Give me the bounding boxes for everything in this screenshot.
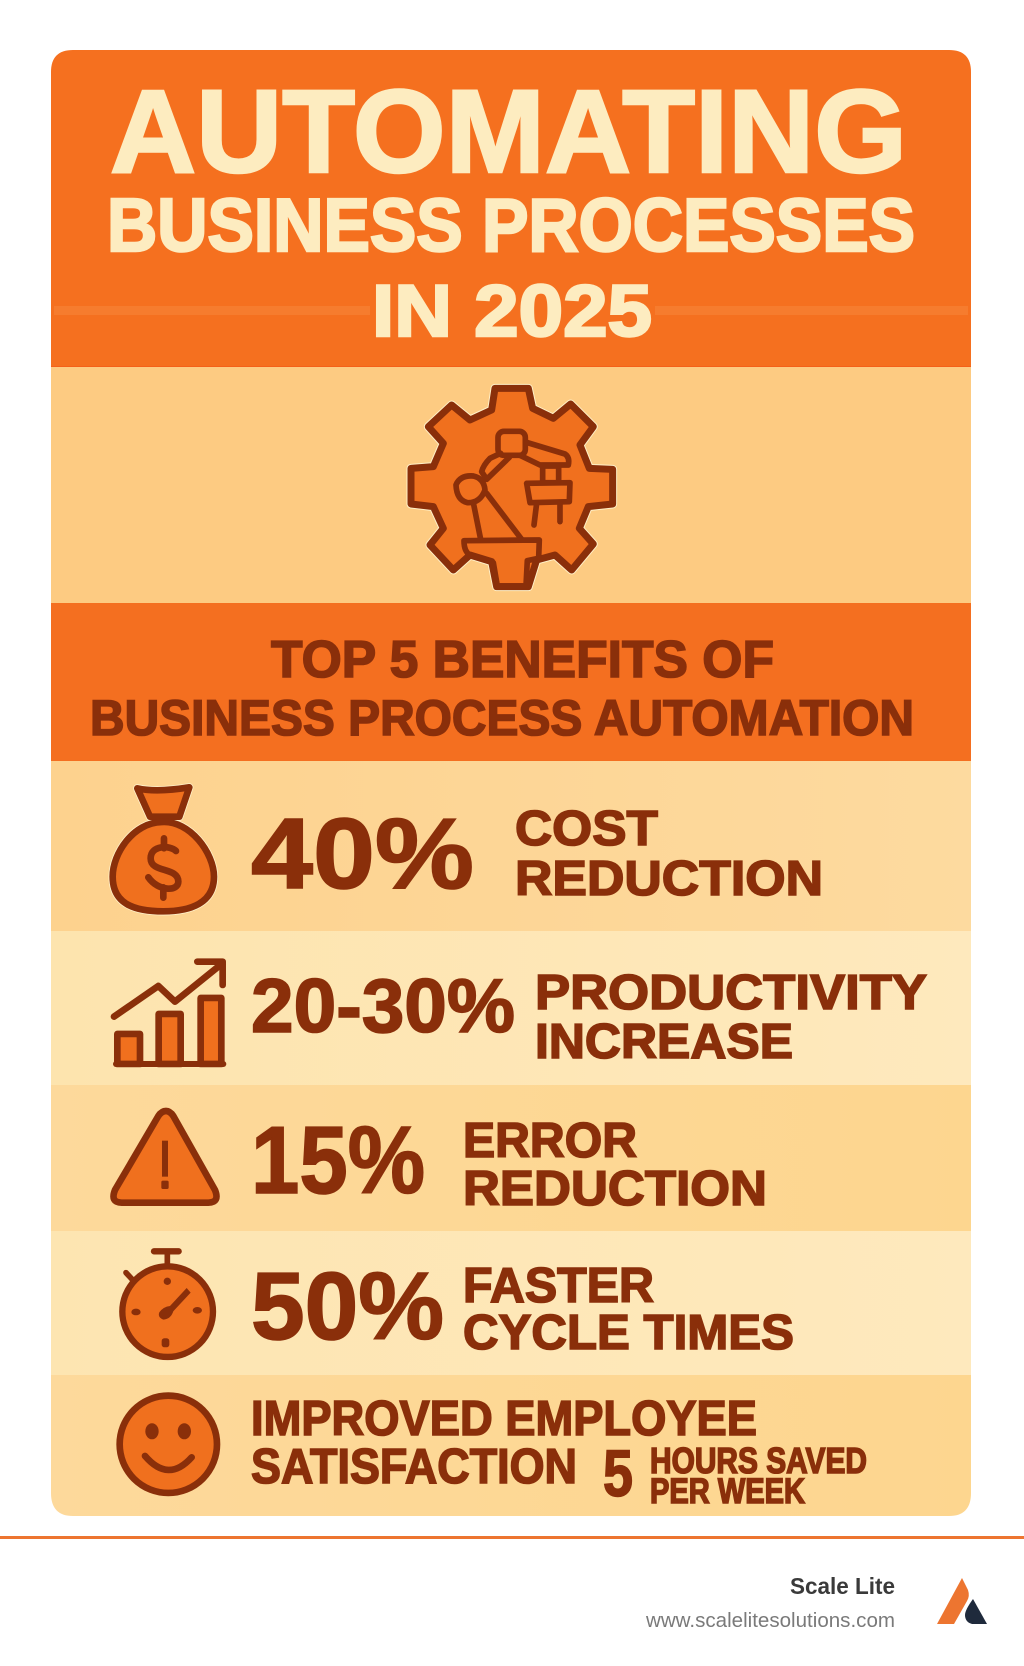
heading line 1: TOP 5 BENEFITS OF: [271, 631, 774, 689]
icon: money bag: [113, 787, 214, 911]
icon: gear with robot arm: [411, 388, 613, 587]
stat: 50%: 50%: [251, 1253, 444, 1360]
stat: 40%: 40%: [251, 798, 474, 910]
label: productivity increase: PRODUCTIVITY: [535, 966, 927, 1020]
label: productivity increase: INCREASE: [535, 1015, 793, 1069]
icon: warning triangle: [113, 1111, 216, 1203]
panel: benefits heading band: [51, 603, 971, 761]
stat: 20-30%: 20-30%: [251, 964, 515, 1049]
panel: improved employee satisfaction: [51, 1375, 971, 1516]
label: productivity increase: [535, 966, 927, 1069]
label: error reduction: ERROR: [463, 1114, 637, 1168]
title line 1: AUTOMATING: [110, 66, 907, 198]
footer: brand: [645, 1573, 987, 1632]
label: faster cycle times: FASTER: [463, 1259, 654, 1313]
label: faster cycle times: CYCLE TIMES: [463, 1306, 794, 1360]
label: improved employee satisfaction: IMPROVED EMPLOYEE: [251, 1392, 757, 1446]
icon: smiley face: [120, 1396, 217, 1493]
panel: 40% cost reduction: [51, 761, 971, 931]
brand name: Scale Lite: [790, 1573, 895, 1599]
icon: growth chart: [114, 962, 223, 1064]
panel: 20-30% productivity increase: [51, 931, 971, 1085]
label: hours saved per week: [650, 1440, 867, 1511]
label: hours saved per week: HOURS SAVED: [650, 1440, 867, 1481]
label: error reduction: [463, 1114, 767, 1216]
label: cost reduction: REDUCTION: [515, 852, 823, 906]
title line 2: BUSINESS PROCESSES: [107, 183, 915, 267]
brand url: www.scalelitesolutions.com: [645, 1610, 895, 1632]
label: improved employee satisfaction: [251, 1392, 757, 1494]
stat: 15%: 15%: [251, 1107, 425, 1214]
label: hours saved per week: PER WEEK: [650, 1472, 805, 1511]
panel: title header: [51, 50, 971, 368]
label: improved employee satisfaction: SATISFACTION: [251, 1440, 577, 1494]
label: error reduction: REDUCTION: [463, 1162, 767, 1216]
label: faster cycle times: [463, 1259, 794, 1360]
panel: 50% faster cycle times: [51, 1231, 971, 1375]
label: cost reduction: [515, 802, 823, 906]
label: cost reduction: COST: [515, 802, 658, 856]
stat: 5 hours: 5: [603, 1436, 633, 1510]
panel: 15% error reduction: [51, 1085, 971, 1231]
icon: stopwatch: [122, 1251, 213, 1357]
panel: gear illustration: [51, 367, 971, 603]
heading line 2: BUSINESS PROCESS AUTOMATION: [90, 690, 914, 746]
title line 3: IN 2025: [372, 271, 652, 352]
icon: scale lite logo: [937, 1578, 987, 1624]
